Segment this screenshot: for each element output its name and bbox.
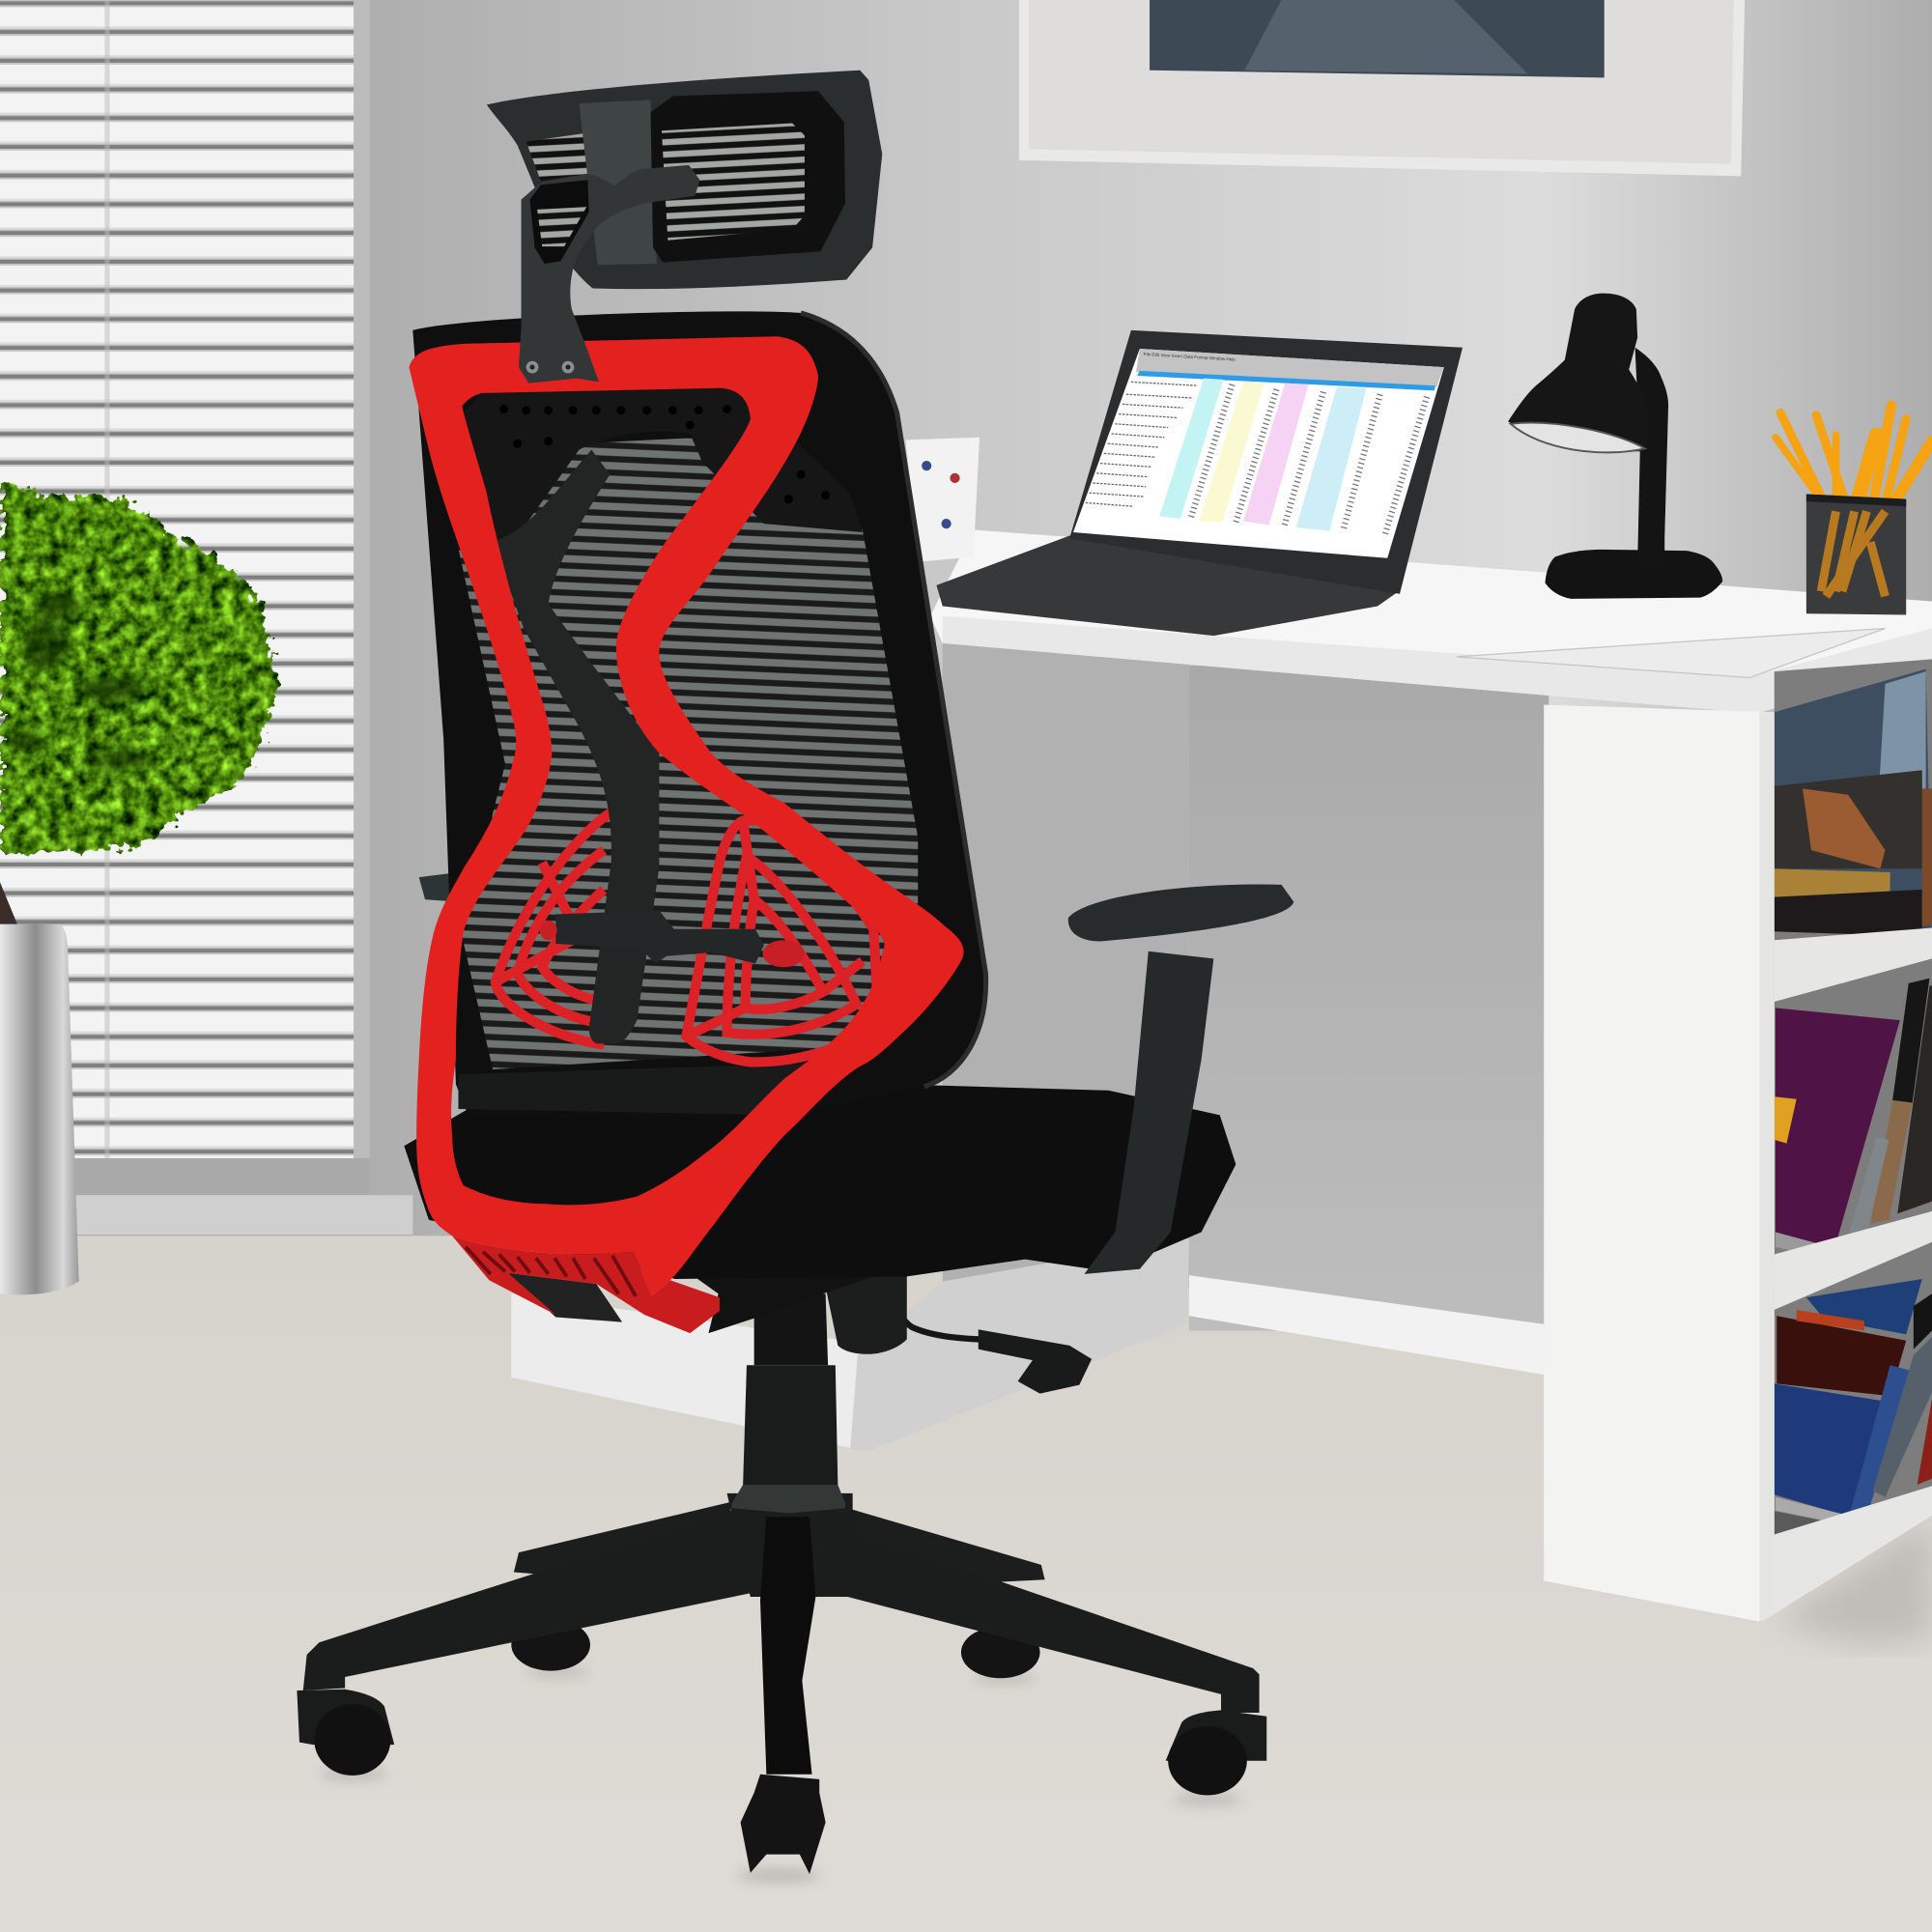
- desk top: [930, 529, 1932, 714]
- stem: [0, 882, 17, 926]
- under-desk wall panel: [943, 635, 1548, 1375]
- lower back shell: [458, 1062, 850, 1115]
- floor: [0, 1236, 1932, 1932]
- left armrest stub: [419, 872, 458, 902]
- books: stacked lower blue: [1772, 1365, 1914, 1538]
- books: stacked brown: [1776, 1310, 1906, 1396]
- lamp neck: [1635, 348, 1668, 563]
- headrest recess: [650, 91, 845, 263]
- laptop lid: [1069, 330, 1463, 594]
- pencils inside cup: [1821, 511, 1886, 596]
- books: stacked upper blue: [1806, 1279, 1922, 1334]
- headrest bracket: [519, 165, 699, 384]
- laptop: [936, 330, 1463, 636]
- lamp shade: [1508, 294, 1649, 451]
- lumbar support pad: left: [496, 810, 613, 1045]
- back spine strut: [493, 450, 659, 1043]
- tilt lever: [823, 1269, 1092, 1394]
- book: bird cover: [1775, 669, 1932, 936]
- desk left base: [511, 1238, 1189, 1452]
- lamp base: [1545, 550, 1722, 599]
- caster shadows: [319, 1667, 1242, 1883]
- spreadsheet menu text: File Edit View Insert Data Format Window Help: [1144, 352, 1236, 362]
- headrest mesh: [662, 124, 805, 241]
- front right caster: [1166, 1710, 1266, 1795]
- wall: [0, 0, 1932, 1269]
- five-star base: [303, 1493, 1260, 1775]
- tilt mechanism: [823, 1269, 907, 1354]
- red lower grille: [452, 1236, 720, 1333]
- shelf floor shadow: [1775, 1518, 1932, 1645]
- back casters: [511, 1619, 1040, 1678]
- shelf board: upper: [1775, 927, 1932, 1002]
- headrest left opening: [526, 133, 587, 182]
- bookshelf: [1762, 659, 1932, 1622]
- pencil holder: [1776, 406, 1932, 614]
- lumbar support pad: right: [686, 820, 877, 1062]
- front left caster: [297, 1690, 394, 1776]
- spreadsheet values: [1190, 384, 1427, 535]
- framed picture: [1019, 0, 1745, 176]
- headrest centre plate: [579, 99, 657, 265]
- lumbar adjuster: [540, 911, 805, 967]
- foliage: [0, 483, 277, 854]
- perforated top plate: [462, 388, 863, 545]
- lamp light: [1511, 423, 1645, 452]
- gas lift column: [732, 1293, 845, 1513]
- shelf board: middle: [1775, 1211, 1932, 1310]
- backrest shell: [412, 311, 986, 1115]
- backrest fabric edge: [801, 313, 986, 1087]
- front caster: [741, 1775, 826, 1874]
- laptop screen: [1073, 349, 1444, 558]
- books: purple volume: [1775, 1008, 1900, 1261]
- desk lamp: [1508, 294, 1722, 599]
- books: spines: [1848, 979, 1932, 1236]
- plant: [0, 483, 277, 1294]
- seat: [404, 1084, 1236, 1279]
- office chair: [297, 71, 1293, 1874]
- desk leg: [1544, 705, 1775, 1622]
- right armrest: [1068, 885, 1293, 1274]
- cup rim: [1806, 494, 1906, 506]
- window blinds: [0, 0, 412, 1235]
- books: leaning spines: [1873, 1293, 1932, 1497]
- mesh cup: [1806, 494, 1906, 614]
- pot: [0, 924, 79, 1294]
- seat mechanism: [675, 1263, 912, 1333]
- shelf board: lower: [1762, 1486, 1932, 1622]
- pencils: [1776, 406, 1932, 499]
- mesh panel: [458, 438, 918, 1069]
- spreadsheet row labels: [1086, 382, 1198, 506]
- laptop base: [936, 535, 1399, 636]
- red frame: [409, 336, 964, 1296]
- mug: [906, 438, 980, 562]
- headrest: [487, 71, 882, 289]
